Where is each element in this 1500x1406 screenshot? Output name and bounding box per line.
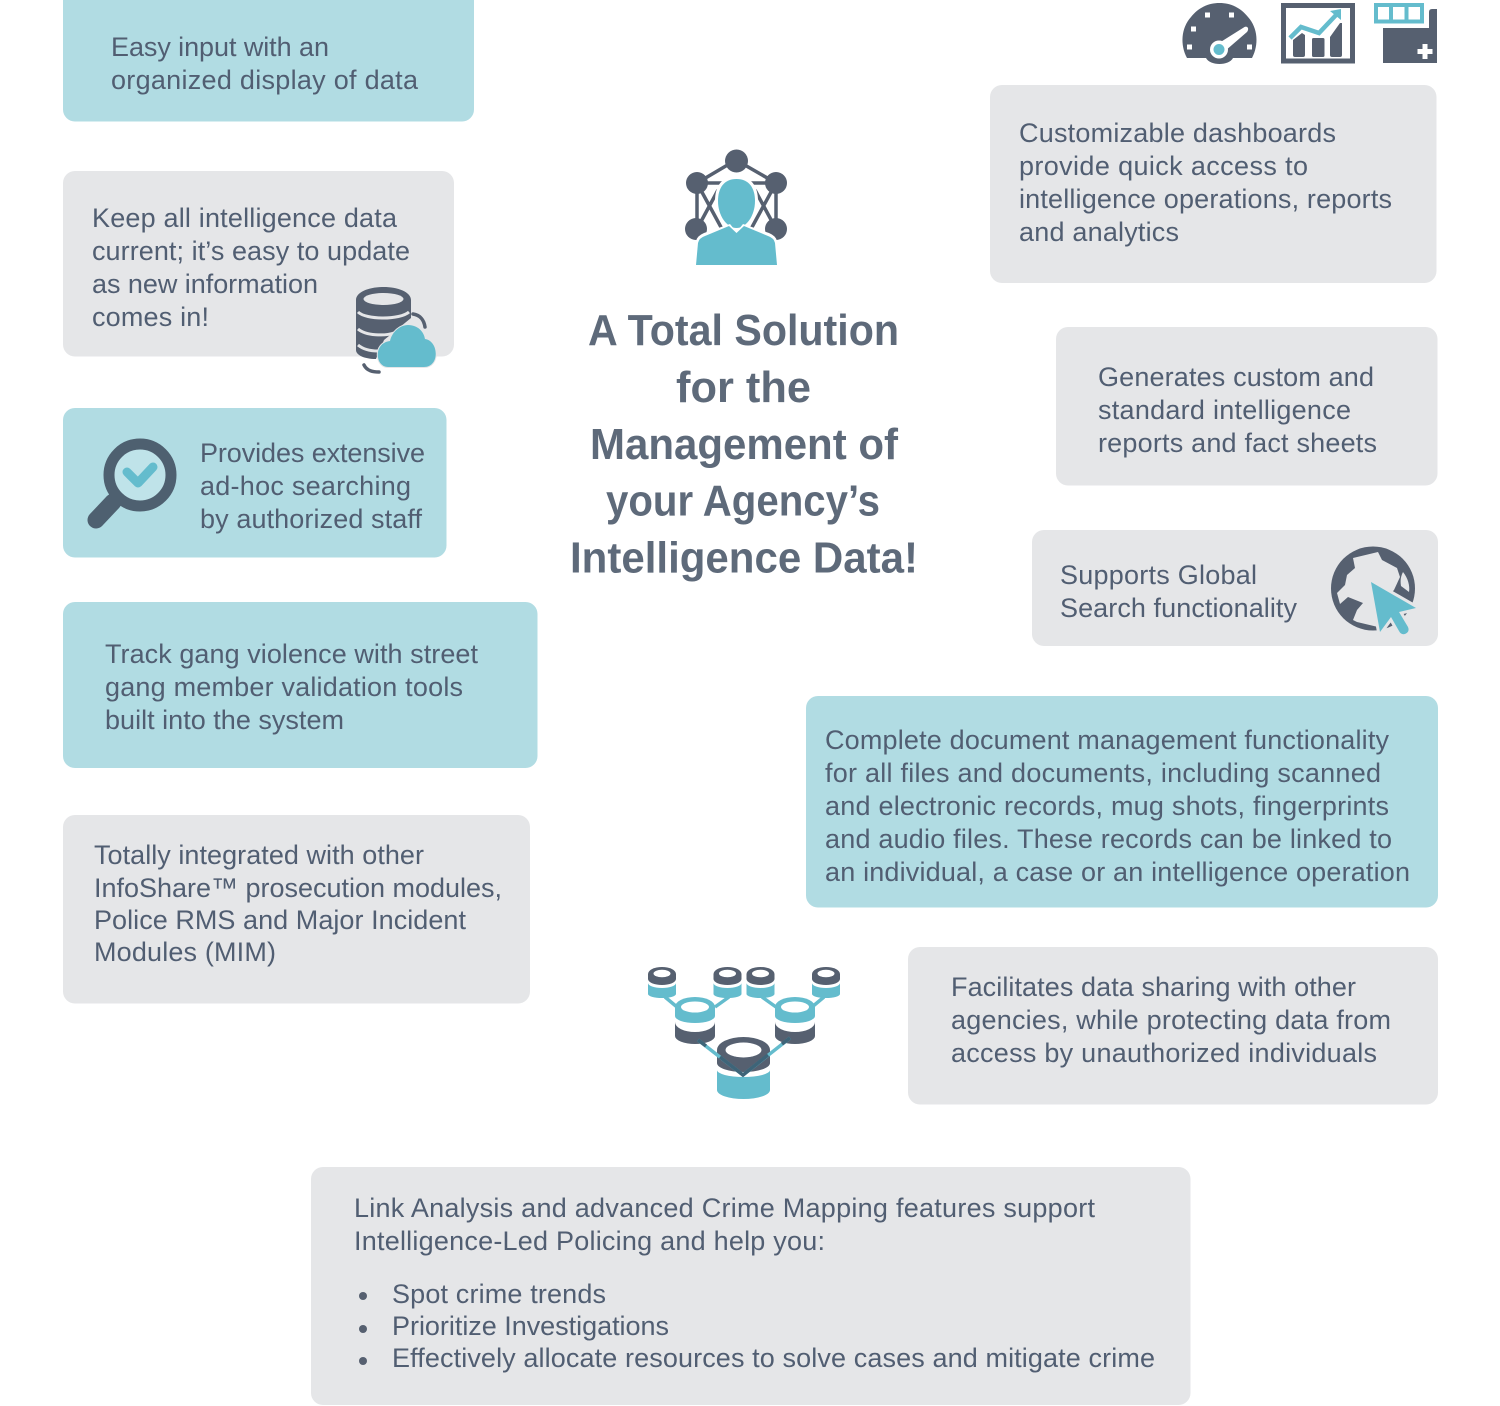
text: document management: and electronic records, mug shots, fingerprints [825,791,1389,821]
text: global search: Supports Global [1060,560,1257,590]
text: ad-hoc searching: Provides extensive [200,438,425,468]
text: custom reports: reports and fact sheets [1098,428,1377,458]
text: gang violence tracking: Track gang violence with street [105,639,478,669]
text: dashboards: provide quick access to [1019,151,1308,181]
text: ad-hoc searching: ad-hoc searching [200,471,411,501]
text: easy input: Easy input with an [111,32,329,62]
text: keep data current: current; it’s easy to update [92,236,410,266]
icon: person in network [685,150,787,267]
panel: link analysis [311,1167,1190,1405]
text: integration: Totally integrated with other [94,840,424,870]
panel: dashboards [990,85,1436,283]
bullet list: Spot crime trends [392,1279,606,1309]
text: gang violence tracking [105,639,478,735]
text: document management: for all files and documents, including scanned [825,758,1381,788]
text: easy input [111,32,419,95]
text: keep data current [92,203,410,332]
text: keep data current: comes in! [92,302,209,332]
icon: database and cloud [356,287,436,372]
text: global search [1060,560,1298,623]
text: document management: and audio files. These records can be linked to [825,824,1392,854]
text: data sharing: access by unauthorized individuals [951,1038,1377,1068]
icon: globe with cursor [1331,546,1416,634]
icon: form with plus [1376,4,1437,63]
title [570,306,918,582]
text: dashboards [1019,118,1392,247]
panel: integration [63,815,530,1004]
text: data sharing [951,972,1391,1068]
title: Management of [590,420,898,469]
panel: keep data current [63,171,454,356]
panel: document management [806,696,1438,908]
bullet list: Effectively allocate resources to solve cases and mitigate crime [392,1343,1155,1373]
text: link analysis intro: Intelligence-Led Policing and help you: [354,1226,825,1256]
bullet list [359,1279,1155,1373]
text: document management [825,725,1410,887]
text: dashboards: intelligence operations, reports [1019,184,1392,214]
text: ad-hoc searching: by authorized staff [200,504,422,534]
text: integration: InfoShare™ prosecution modules, [94,873,502,903]
title: for the [676,363,811,412]
text: custom reports: standard intelligence [1098,395,1351,425]
panel: custom reports [1056,327,1438,486]
panel: ad-hoc searching [63,408,446,558]
text: integration: Police RMS and Major Incident [94,905,466,935]
text: keep data current: Keep all intelligence data [92,203,398,233]
text: integration: Modules (MIM) [94,937,276,967]
text: gang violence tracking: gang member validation tools [105,672,463,702]
bullet list: Prioritize Investigations [392,1311,669,1341]
text: easy input: organized display of data [111,65,419,95]
panel: global search [1032,530,1438,646]
panel: easy input [63,0,474,122]
text: data sharing: agencies, while protecting data from [951,1005,1391,1035]
text: dashboards: and analytics [1019,217,1179,247]
text: custom reports: Generates custom and [1098,362,1374,392]
icon: gauge [1182,3,1257,64]
text: gang violence tracking: built into the system [105,705,344,735]
icon: magnifier with check [96,444,171,520]
text: integration [94,840,502,967]
text: document management: an individual, a case or an intelligence operation [825,857,1410,887]
text: custom reports [1098,362,1377,458]
text: keep data current: as new information [92,269,318,299]
icon: chart [1284,6,1352,61]
panel: data sharing [908,947,1438,1104]
icon: connected databases [648,967,840,1099]
title: Intelligence Data! [570,534,918,582]
text: ad-hoc searching [200,438,425,534]
title: A Total Solution [588,306,899,355]
text: global search: Search functionality [1060,593,1298,623]
text: link analysis intro: Link Analysis and advanced Crime Mapping features support [354,1193,1095,1223]
title: your Agency’s [606,476,880,526]
text: link analysis intro [354,1193,1095,1256]
text: dashboards: Customizable dashboards [1019,118,1336,148]
panel: gang violence tracking [63,602,538,768]
text: data sharing: Facilitates data sharing with other [951,972,1356,1002]
text: document management: Complete document management functionality [825,725,1390,755]
